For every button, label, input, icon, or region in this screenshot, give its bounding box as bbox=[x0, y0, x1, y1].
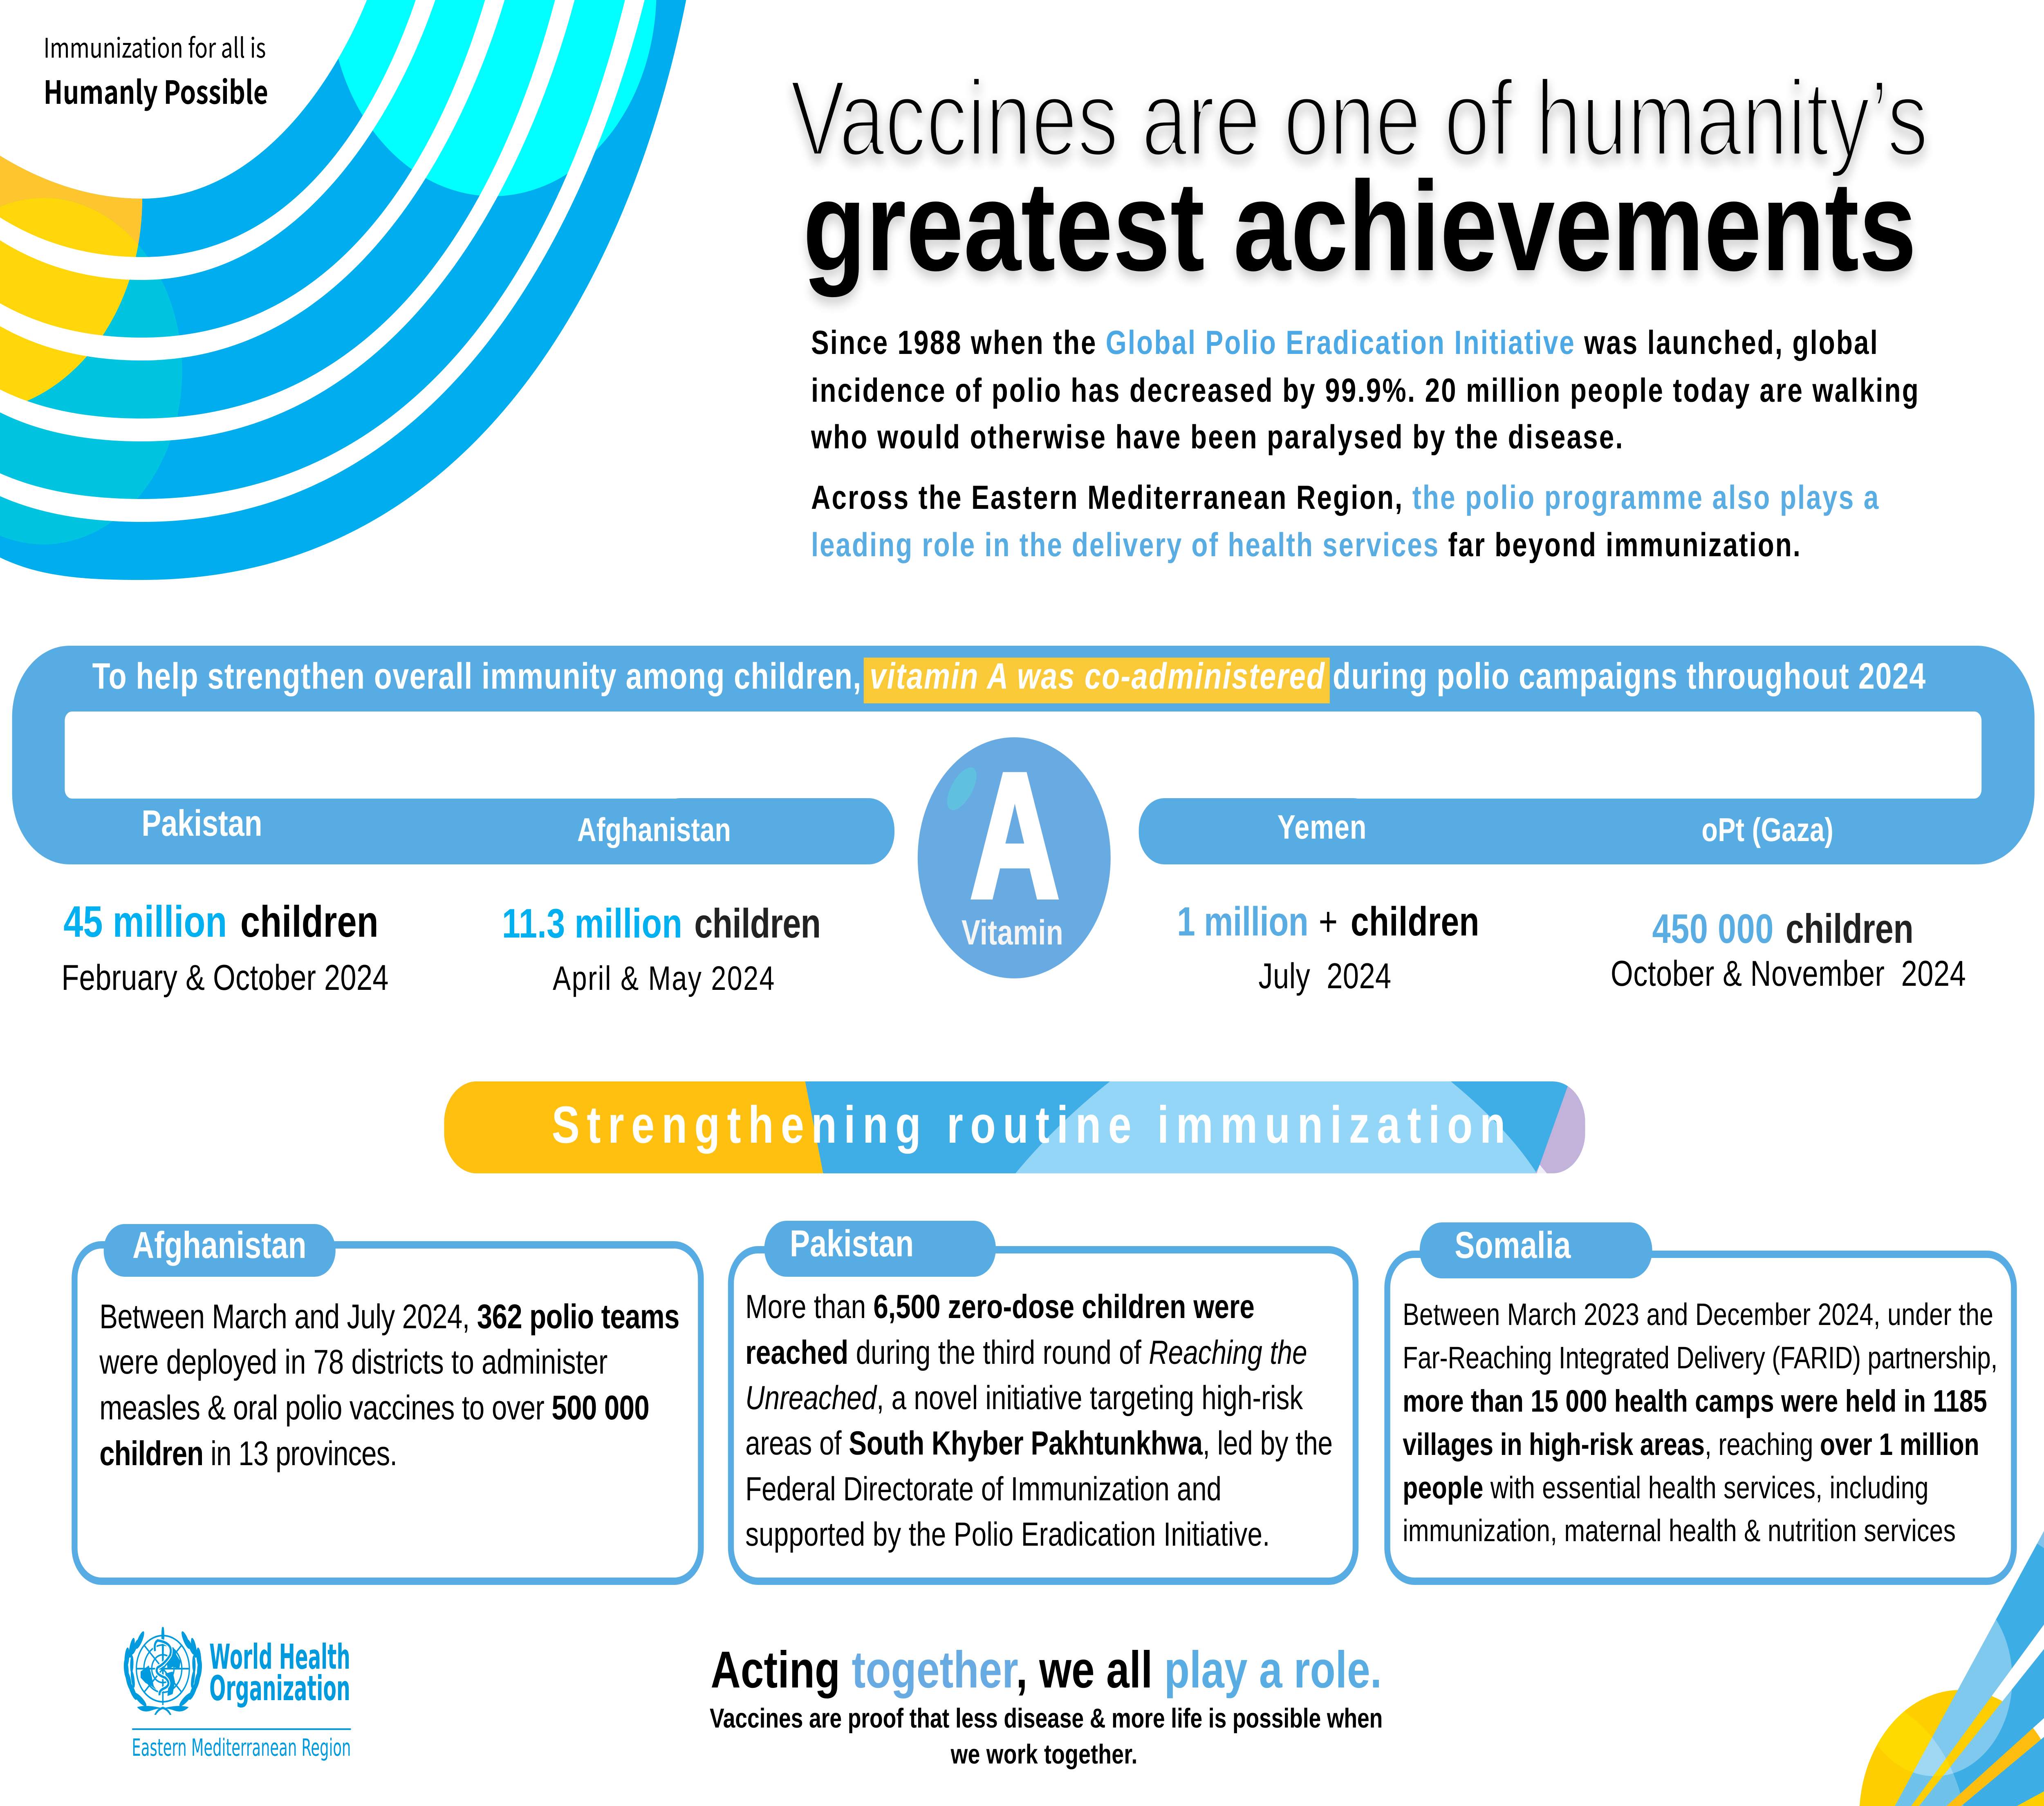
stat: oPt Gaza: October & November 2024 bbox=[1611, 953, 1966, 994]
country labels: Pakistan bbox=[141, 803, 262, 844]
body text: Afghanistan: were deployed in 78 districts to administer bbox=[99, 1343, 607, 1381]
body text: Somalia bbox=[1403, 1297, 1997, 1548]
panel: Somalia bbox=[1387, 1222, 2014, 1581]
body text: Somalia: Between March 2023 and December 2024, under the bbox=[1403, 1297, 1993, 1332]
body text: Somalia: more than 15 000 health camps were held in 1185 bbox=[1403, 1384, 1987, 1419]
stat: oPt Gaza: 450 000 bbox=[1652, 906, 1773, 952]
body text: Pakistan bbox=[745, 1288, 1333, 1553]
country labels: Yemen bbox=[1278, 808, 1366, 846]
icon: WHO emblem bbox=[123, 1627, 203, 1715]
icon: vitamin A badge bbox=[918, 736, 1111, 978]
tab: Afghanistan: Afghanistan bbox=[132, 1224, 307, 1266]
stat: oPt Gaza: children bbox=[1786, 906, 1914, 952]
tab: Pakistan bbox=[764, 1221, 996, 1277]
body text: Somalia: people with essential health services, including bbox=[1403, 1470, 1929, 1505]
icon: vitamin A badge: A bbox=[970, 736, 1059, 934]
stat: Pakistan: 45 million bbox=[63, 897, 227, 946]
decorative burst: bottom-right rays bbox=[1859, 1531, 2044, 1806]
stat: oPt Gaza bbox=[1611, 906, 1966, 994]
country labels: Afghanistan bbox=[577, 812, 731, 848]
stat: Afghanistan: 11.3 million bbox=[502, 901, 682, 947]
logo: World Health Organization Eastern Mediterranean Region bbox=[123, 1627, 351, 1761]
icon: vitamin A badge: Vitamin bbox=[961, 913, 1063, 952]
stat: Pakistan: children bbox=[240, 897, 379, 946]
stat: Pakistan: February & October 2024 bbox=[61, 957, 388, 998]
stat: Pakistan bbox=[61, 897, 388, 998]
stat: Yemen: children bbox=[1351, 899, 1479, 944]
body text: Afghanistan bbox=[99, 1297, 679, 1473]
vitamin A headline: during polio campaigns throughout 2024 bbox=[1333, 656, 1925, 697]
vitamin A headline: To help strengthen overall immunity among children, bbox=[92, 656, 861, 697]
logo: World Health Organization Eastern Mediterranean Region: Eastern Mediterranean Region bbox=[132, 1734, 351, 1761]
vitamin A headline bbox=[92, 656, 1925, 697]
stat: Yemen: 1 million bbox=[1177, 899, 1309, 944]
body text: Pakistan: Federal Directorate of Immunization and bbox=[745, 1470, 1221, 1508]
stat: Afghanistan: April & May 2024 bbox=[553, 959, 774, 997]
intro text block: Across the Eastern Mediterranean Region, the polio programme also plays a bbox=[811, 479, 1879, 516]
body text: Afghanistan: children in 13 provinces. bbox=[99, 1434, 397, 1473]
body text: Afghanistan: Between March and July 2024, 362 polio teams bbox=[99, 1297, 679, 1336]
intro text block: who would otherwise have been paralysed by the disease. bbox=[811, 418, 1623, 456]
logo: World Health Organization Eastern Mediterranean Region: World Health bbox=[209, 1637, 350, 1677]
panel: vitamin A campaign frame bbox=[12, 646, 2035, 868]
body text: Somalia: Far-Reaching Integrated Delivery (FARID) partnership, bbox=[1403, 1341, 1997, 1375]
tagline: Immunization for all is Humanly Possible: Immunization for all is bbox=[43, 27, 266, 66]
logo: World Health Organization Eastern Mediterranean Region: Organization bbox=[209, 1668, 350, 1708]
section banner: Strengthening routine immunization: Strengthening routine immunization bbox=[552, 1096, 1505, 1154]
tab: Afghanistan bbox=[104, 1224, 336, 1277]
country labels bbox=[141, 803, 1833, 848]
stat: Yemen: July 2024 bbox=[1258, 956, 1391, 996]
stat: Afghanistan: children bbox=[694, 901, 821, 947]
tab: Somalia: Somalia bbox=[1455, 1224, 1571, 1266]
panel: Pakistan bbox=[731, 1221, 1356, 1581]
panel: Afghanistan bbox=[74, 1224, 701, 1581]
tagline: Immunization for all is Humanly Possible bbox=[43, 27, 268, 113]
closing message bbox=[710, 1640, 1383, 1770]
body text: Pakistan: areas of South Khyber Pakhtunkhwa, led by the bbox=[745, 1425, 1333, 1462]
body text: Pakistan: Unreached, a novel initiative targeting high-risk bbox=[745, 1379, 1303, 1417]
vitamin A headline highlight bbox=[864, 658, 1330, 703]
body text: Pakistan: reached during the third round of Reaching the bbox=[745, 1334, 1307, 1371]
intro text block: Since 1988 when the Global Polio Eradication Initiative was launched, global bbox=[811, 324, 1878, 361]
body text: Pakistan: More than 6,500 zero-dose children were bbox=[745, 1288, 1255, 1325]
section banner: Strengthening routine immunization bbox=[444, 1081, 1585, 1173]
decorative swoosh: top-left bands bbox=[0, 0, 686, 580]
stat: Afghanistan bbox=[502, 901, 821, 997]
body text: Somalia: immunization, maternal health & nutrition services bbox=[1403, 1513, 1956, 1548]
tab: Somalia bbox=[1420, 1222, 1652, 1278]
country labels: oPt (Gaza) bbox=[1701, 812, 1833, 848]
title: greatest achievements bbox=[803, 155, 1916, 298]
intro text block bbox=[811, 324, 1918, 564]
intro text block: leading role in the delivery of health services far beyond immunization. bbox=[811, 526, 1800, 564]
closing message: Vaccines are proof that less disease & more life is possible when bbox=[710, 1703, 1383, 1734]
body text: Afghanistan: measles & oral polio vaccines to over 500 000 bbox=[99, 1388, 650, 1427]
intro text block: incidence of polio has decreased by 99.9%. 20 million people today are walking bbox=[811, 372, 1918, 409]
body text: Somalia: villages in high-risk areas, reaching over 1 million bbox=[1403, 1427, 1979, 1462]
body text: Pakistan: supported by the Polio Eradication Initiative. bbox=[745, 1516, 1270, 1553]
tagline: Immunization for all is Humanly Possible: Humanly Possible bbox=[43, 67, 268, 113]
closing message: we work together. bbox=[950, 1739, 1137, 1770]
closing message: Acting together, we all play a role. bbox=[710, 1640, 1382, 1699]
vitamin A headline: vitamin A was co-administered bbox=[870, 656, 1325, 697]
title: Vaccines are one of humanity’s bbox=[790, 58, 1928, 179]
tab: Pakistan: Pakistan bbox=[790, 1223, 914, 1264]
stat: Yemen bbox=[1177, 899, 1479, 996]
title bbox=[790, 58, 1928, 304]
stat: Yemen: + bbox=[1319, 899, 1338, 944]
